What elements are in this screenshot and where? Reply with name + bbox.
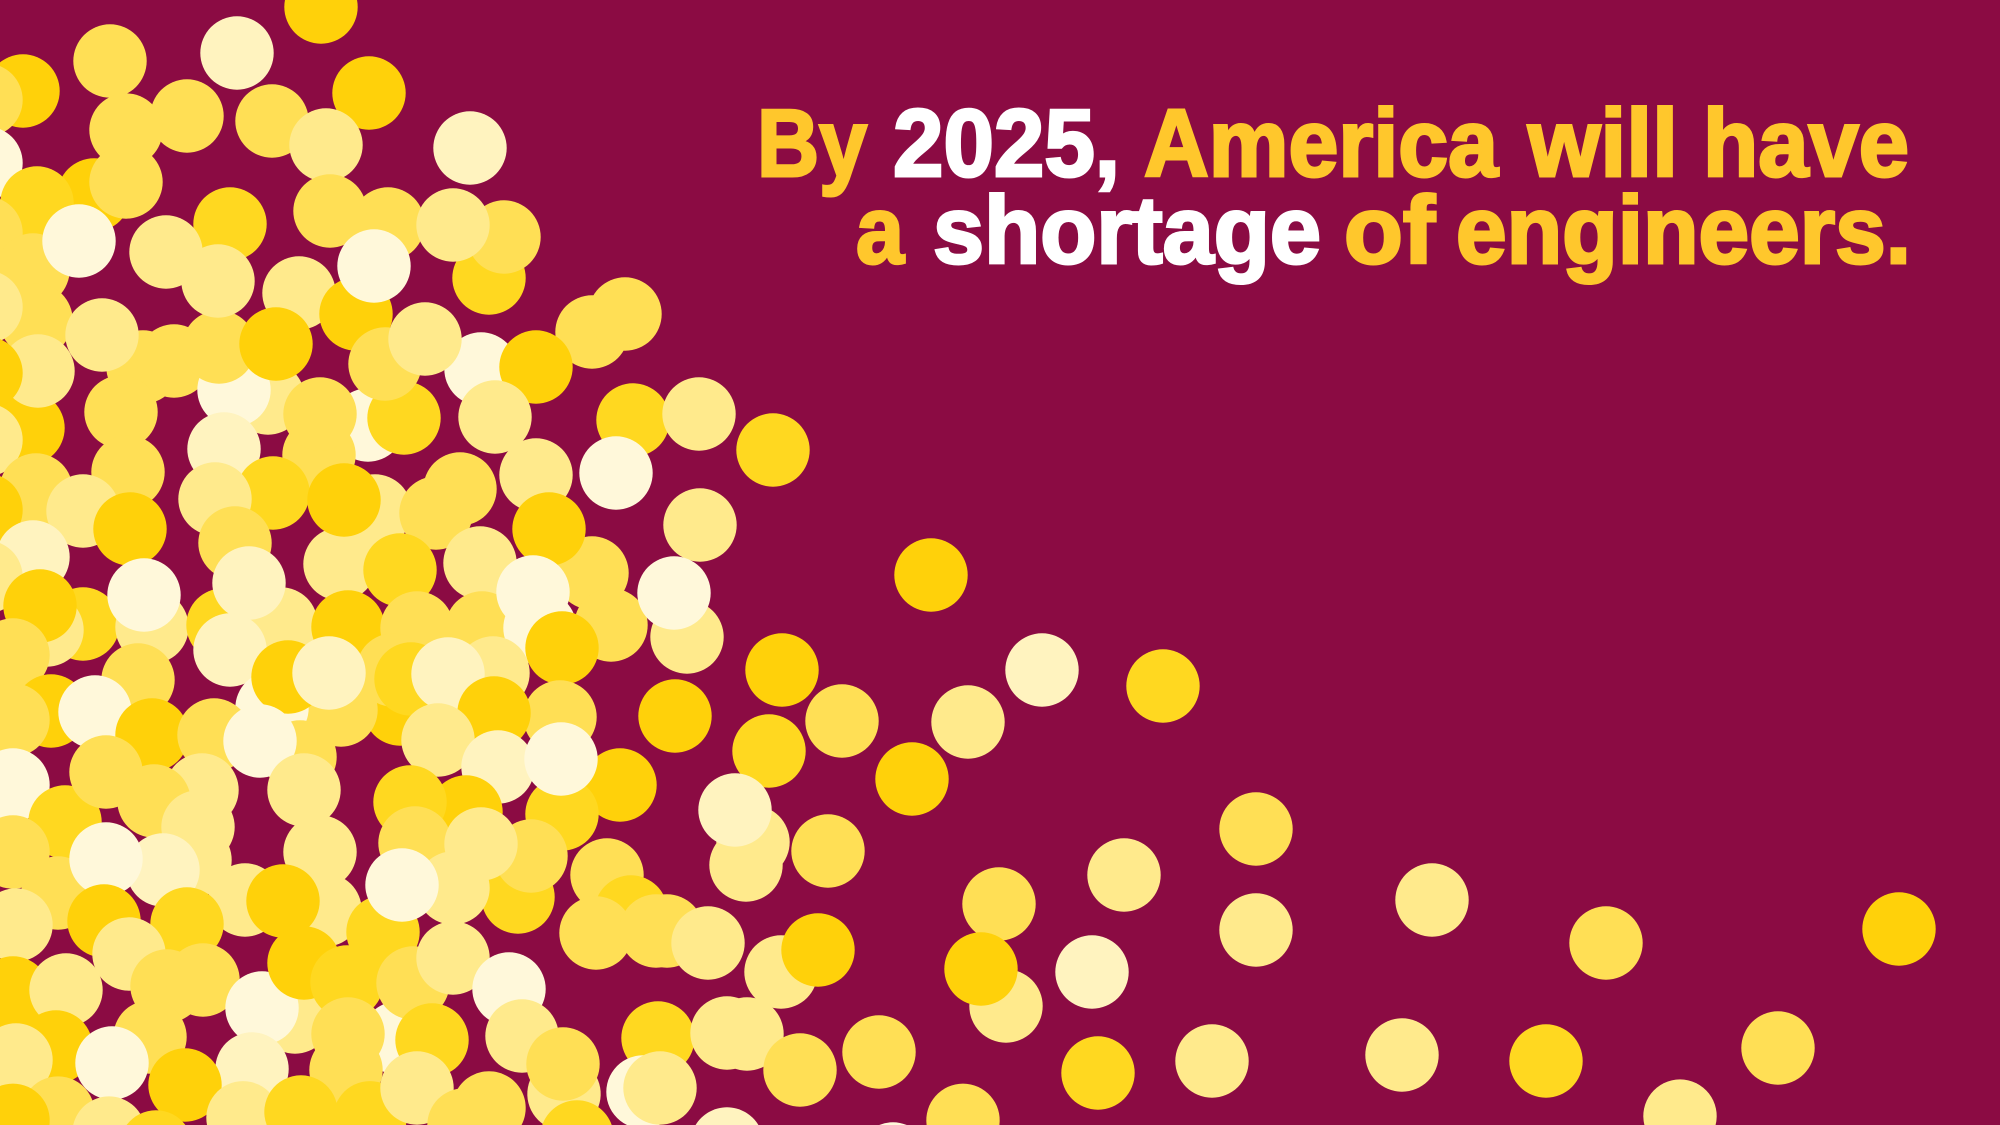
title line 2: a <box>856 177 905 284</box>
title line 2: engineers. <box>1456 177 1911 284</box>
title line 1: will <box>1527 90 1678 197</box>
title line 1: By <box>757 90 867 197</box>
title <box>757 90 1911 284</box>
title line 2: shortage <box>933 177 1321 284</box>
title line 1: 2025, <box>893 90 1120 197</box>
title line 2 <box>856 177 1911 284</box>
title line 1 <box>757 90 1909 197</box>
title line 1: have <box>1703 90 1909 197</box>
title line 2: of <box>1344 177 1436 284</box>
title line 1: America <box>1144 90 1499 197</box>
